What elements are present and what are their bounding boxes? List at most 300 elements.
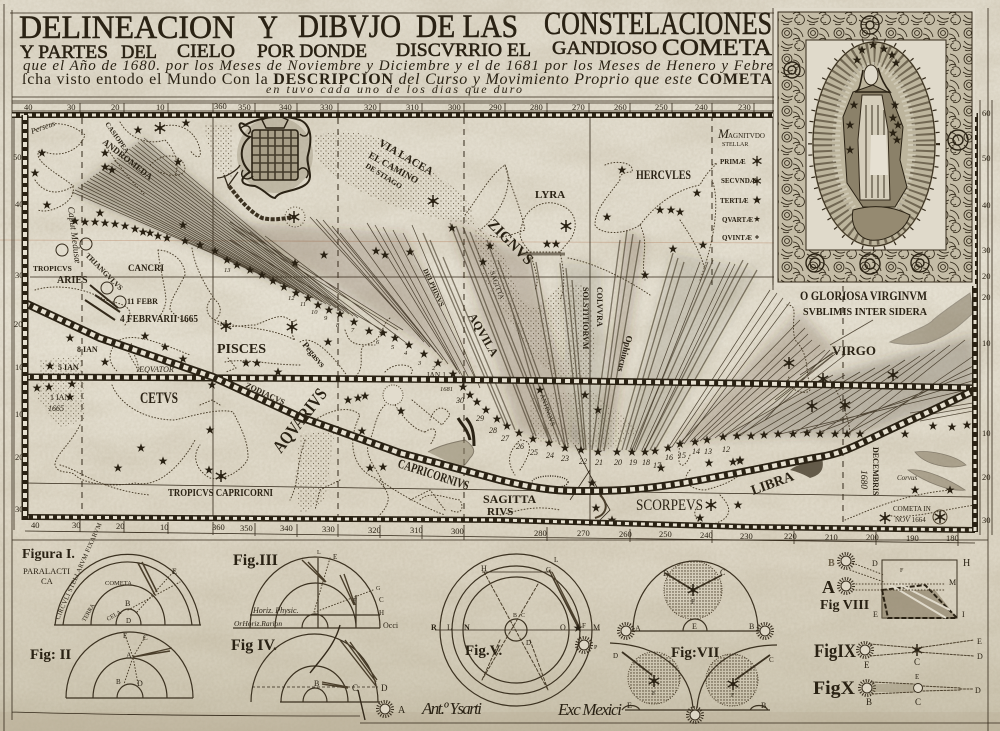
figure VII: B [761,701,766,710]
far right bundle of rays [723,340,975,437]
bottom degree scale: 280 [534,528,547,538]
map labels: DELPHINVS [421,267,446,308]
aquarius figure [290,385,450,520]
map labels: SAGITTA [483,492,536,506]
sun and signature: Exc Mexici [557,700,622,719]
figure I: Figura I. [22,547,75,562]
figure II: C [143,634,148,642]
day numbers of the comet: 6 [376,339,380,346]
side degree scales: 10 [982,338,990,348]
figure VIII: B [828,558,835,569]
figure I: CA [41,576,54,586]
figure I: PARALACTI [23,566,70,576]
title block [19,6,773,96]
inset: Virgin of Guadalupe in floral frame [774,8,975,286]
hydra crater and raven figures [908,452,966,494]
tail tone shading [72,138,975,450]
cygnus figure [465,165,525,237]
bottom degree scale: 230 [740,531,753,541]
figure V: F [582,622,586,630]
map labels: SAGITTA [488,270,506,300]
figure III: OrHoriz.Rarion [234,619,282,628]
figure V: P [594,645,598,651]
map labels: ANDROMEDA [101,137,155,182]
figure VII: D [613,652,618,660]
title line 1: CONSTELACIONES [544,6,772,42]
day numbers of the comet: 15 [678,451,686,460]
map labels: DECEMBRIS [871,447,880,496]
hand and chain holding the star [217,165,305,227]
top degree scale: 250 [655,102,668,112]
figure II: A [126,651,132,660]
side degree scales: 40 [982,200,990,210]
top degree scale: 300 [448,102,461,112]
map labels: Corvus [897,474,918,482]
sagittarius figure [500,440,610,520]
perseus cassiopeia andromeda figures [35,122,200,211]
dashed meridians [82,115,843,530]
day numbers of the comet: 18 [642,458,650,467]
figure X: B [866,697,872,707]
figure VIII: D [872,559,878,568]
title line 2: GANDIOSO [552,38,657,59]
title line 1: Y [258,10,278,46]
map labels: SCORPEVS [636,497,703,514]
top degree scale: 340 [279,102,292,112]
left band [22,115,28,520]
figure X: FigX [813,678,855,699]
diagrams section [22,522,983,722]
map labels: ANTINOVS [538,393,556,427]
title line 2: CIELO [177,41,235,62]
top degree scale: 230 [738,102,751,112]
title line 2: DISCVRRIO EL [396,40,531,61]
day numbers of the comet: 14 [692,447,700,456]
figure I: B [125,599,130,608]
sun and signature: A [398,705,406,716]
figure VII: E [692,622,697,631]
day numbers of the comet: 17 [653,461,662,470]
side degree scales [13,100,992,535]
top degree scale: 350 [238,102,251,112]
figure V: Fig.V. [465,643,502,659]
legend: magnitudes of the stars: AGNITVDO [728,132,765,140]
day numbers of the comet: 20 [614,458,622,467]
figure VIII: M [949,578,956,587]
figure X: E [915,673,919,681]
scorpius figure [679,445,745,525]
figure III: E [333,553,337,561]
title line 1: DIBVJO [298,9,401,45]
coat of arms [237,114,313,198]
top degree scale: 240 [695,102,708,112]
title line 2 [20,35,772,63]
map labels: SOLSTITIORVM [581,287,590,350]
legend: magnitudes of the stars: TERTIÆ [720,197,749,205]
sun and signature [378,699,622,719]
map labels: TROPICVS [33,264,72,273]
side degree scales: 20 [15,452,24,462]
figure V: G [546,566,551,574]
sun and signature: Ant.º Ysarti [421,699,482,718]
side degree scales: 20 [982,292,990,302]
lyra figure [520,203,650,300]
aries and taurus dark knot [56,238,126,320]
milky way [38,125,640,515]
bottom degree scale [25,520,975,546]
map labels: SVBLIMIS INTER SIDERA [803,306,927,318]
figure VIII: E [873,610,878,619]
pegasus figure [300,318,412,380]
title line 1 [19,6,772,46]
map labels: 1 IAN [50,393,70,402]
virgin figure [843,65,910,240]
map labels: DE STIAGO [364,161,404,191]
map labels [29,119,931,524]
comet of 1664 [845,490,975,524]
day numbers of the comet: 4 [404,350,408,357]
figure IX [814,637,983,670]
day numbers of the comet: 1681 [440,386,453,393]
figure VIII: Fig VIII [820,598,869,613]
top degree scale: 20 [111,102,120,112]
map labels: 8 IAN [77,345,98,354]
stars of hercules and lyra [290,165,708,279]
legend: magnitudes of the stars: M [717,126,730,141]
side degree scales: 30 [15,270,24,280]
day numbers of the comet: 13 [224,267,231,274]
map labels: Pegasvs [300,340,328,370]
bottom degree scale: 10 [160,522,168,532]
legend: magnitudes of the stars: SECVNDÆ [721,177,757,185]
map labels: TROPICVS CAPRICORNI [168,488,273,499]
side degree scales: 40 [15,199,24,209]
side degree scales: 60 [982,108,990,118]
map labels: 4 FEBRVARII 1665 [120,314,198,325]
figure I: COMETA [105,580,132,587]
side degree scales: 50 [13,152,22,162]
figure X [813,673,981,707]
bottom degree scale: 340 [280,523,293,533]
map labels: ZODIACVS [244,381,287,407]
figure VII: A [635,624,641,633]
figure VII: C [720,568,725,577]
figure III: F [353,597,357,605]
legend: magnitudes of the stars: PRIMÆ [720,158,746,166]
floral border [778,12,972,282]
legend: magnitudes of the stars: QVARTÆ [722,216,753,224]
figure III: C [379,596,384,604]
day numbers of the comet: 28 [489,426,497,435]
day numbers of the comet: 8 [336,322,340,329]
bottom degree scale: 210 [825,532,838,542]
day numbers of the comet: 30 [455,396,464,405]
map labels: CANCRI [128,263,164,273]
map labels: EL CAMINO [367,151,420,186]
figure IV [231,625,388,720]
figure V: L [554,556,558,564]
figure II [30,632,193,698]
other stars by ecliptic [536,385,744,524]
figure VII: F [652,691,656,697]
central left bundle of rays [230,217,480,388]
legend: magnitudes of the stars: QVINTÆ [722,234,752,242]
side degree scales: 30 [982,515,990,525]
figure V: C [521,613,525,619]
side degree scales: 10 [15,409,24,419]
title line 1: DELINEACION [19,10,235,46]
top degree scale: 10 [156,102,164,112]
map labels: ARIES [57,275,88,286]
lyra lamp hatching [520,252,565,256]
figure X: D [975,686,981,695]
map labels: COMETA IN [893,505,931,513]
figure VIII: A [822,577,835,597]
bottom degree scale: 240 [700,530,713,540]
bottom degree scale: 330 [322,524,335,534]
figure VIII [820,554,970,619]
ecliptic band [25,303,975,491]
bottom degree scale: 220 [784,531,797,541]
map labels: NOV 1664 [895,516,926,524]
map labels: Perseus [29,119,56,136]
legend: magnitudes of the stars: STELLAR [722,142,748,148]
hercules figure [595,162,717,280]
cetus figure [55,385,248,495]
figure V: L [447,623,452,632]
day numbers of the comet: 27 [501,434,510,443]
taurus pisces area figures [35,248,296,340]
figure VII: F [691,598,695,606]
title line 2: DEL [121,42,157,63]
figure V: B [513,613,517,619]
map labels: RIVS [487,506,513,518]
figure VII: D [663,569,669,578]
top degree scale: 260 [614,102,627,112]
figure VIII: I [962,610,965,619]
map labels: AQVILA [465,310,502,359]
title line 4: ſcha visto entodo el Mundo Con la DESCRIPCION del Curso y Movimiento Proprio que este COMETA [22,71,772,88]
stars of the north sky [30,118,190,229]
halo of stars [852,40,900,67]
title line 2: Y PARTES [20,42,108,63]
top degree scale: 310 [406,102,419,112]
top degree scale: 30 [67,102,76,112]
top degree scale: 40 [24,102,32,112]
figure VII: F [731,693,735,699]
day numbers of the comet: 9 [324,315,328,322]
figure II: E [123,632,127,640]
map labels: Ophiucus [615,334,635,373]
figure II: Fig: II [30,647,71,663]
central right tails [592,230,757,451]
mandorla rays [810,39,938,249]
top degree scale: 360 [214,101,227,111]
figure III: H [379,609,384,617]
map labels: CETVS [140,390,178,407]
bottom band [25,517,975,530]
day numbers of the comet: 11 [300,301,306,308]
figure V: R [431,623,437,632]
figure I: E [172,567,177,576]
bottom degree scale: 300 [451,526,464,536]
figure V: M [593,623,600,632]
figure V: O [560,623,566,632]
capricorn figure [420,418,474,512]
figure IV: Fig IV. [231,637,277,654]
top degree scale [12,101,775,112]
map labels: VIA LACEA [376,137,435,178]
side degree scales: 20 [982,472,990,482]
figure IX: C [914,657,920,667]
upper left bundle of rays [72,138,358,318]
constellation figures [30,114,975,525]
day numbers of the comet: 24 [546,451,554,460]
day numbers of the comet: 22 [579,457,587,466]
map labels: AQVARIVS [268,384,331,456]
right band [972,113,978,532]
bottom degree scale: 190 [906,533,919,543]
day numbers of the comet: 7 [351,327,355,334]
figure I: TERRA [82,602,97,623]
virgo wing and figure [784,293,973,435]
figure IX: E [977,637,982,646]
side degree scales: 10 [15,362,24,372]
side degree scales: 20 [14,319,22,329]
figure VII: E [627,701,632,710]
libra dark crescent [790,458,823,478]
map labels: TRIANGVLVS [84,251,125,292]
day numbers of the comet: 26 [516,442,524,451]
virgo rays [765,320,873,420]
map labels: LYRA [535,189,565,201]
central dark tails [423,223,586,450]
figure I: D [126,617,131,625]
comet path stars [70,216,972,456]
top degree scale: 270 [572,102,585,112]
figure VIII: F [900,568,904,574]
figure V: H [481,564,487,573]
top band [12,112,773,118]
top degree scale: 320 [364,102,377,112]
bottom degree scale: 250 [659,529,672,539]
legend: magnitudes of the stars [717,126,765,242]
bottom degree scale: 40 [31,520,40,530]
map labels: O GLORIOSA VIRGINVM [800,289,927,303]
top degree scale: 290 [489,102,502,112]
day numbers of the comet: 21 [595,458,603,467]
day numbers of the comet [224,267,730,470]
bottom degree scale: 350 [240,523,253,533]
map labels: Caput Medusæ [65,206,82,265]
side degree scales: 30 [982,245,990,255]
figure II: B [116,678,121,686]
bottom degree scale: 30 [72,520,80,530]
figure IX: E [864,660,870,670]
figure I [22,522,201,625]
figure VII: C [769,656,774,664]
figure I: CELA [106,609,123,623]
figure X: C [915,697,921,707]
day numbers of the comet: 3 [417,360,422,367]
figure III: Horiz. Physic. [252,606,299,615]
map labels: VIRGO [832,343,876,358]
title line 2: COMETA [662,35,772,60]
bottom degree scale: 360 [212,522,225,532]
day numbers of the comet: 12 [722,445,730,454]
bottom degree scale: 180 [946,533,959,543]
bottom degree scale: 320 [368,525,381,535]
figure VIII: H [963,558,970,569]
figure II: D [137,679,143,688]
figure III: L [317,550,321,556]
title line 2: POR DONDE [257,41,367,62]
map labels: CAPRICORNIVS [396,456,471,493]
comet tails [72,138,975,451]
bottom degree scale: 20 [116,521,124,531]
side degree scales: 20 [982,271,990,281]
map labels: 1680 [858,470,868,489]
side degree scales: 50 [982,153,990,163]
figure III [233,550,399,630]
figure VII: B [749,622,754,631]
map labels: CASIOPEA [103,121,131,155]
map labels: PISCES [217,342,266,357]
map labels: HERCVLES [636,167,691,182]
figure V: N [464,623,470,632]
map frame, equator, ecliptic bands [12,113,975,532]
figure VII: Fig:VII [671,645,719,661]
side degree scales: 10 [982,428,990,438]
map labels: IAN 1 [427,370,446,379]
figure VII [610,561,777,722]
figure III: Occi [383,621,399,630]
figure IV: C [352,683,358,693]
top degree scale: 280 [530,102,543,112]
figure IV: B [314,679,319,688]
equator band [25,377,975,388]
day numbers of the comet: 13 [704,447,712,456]
bottom degree scale: 200 [866,532,879,542]
map labels: LIBRA [749,469,797,499]
map labels: 5 IAN [58,363,79,372]
day numbers of the comet: 12 [288,295,295,302]
figure IX: D [977,652,983,661]
figure III: Fig.III [233,552,278,569]
figure V [431,554,600,706]
figure IX: FigIX [814,641,856,662]
figure I: CIRCVLI STELLARVM FIXARVM [54,522,104,621]
title line 1: DE LAS [416,9,518,45]
figure IV: D [381,683,388,693]
grid lines of the map [25,110,975,526]
figure V: D [526,639,531,647]
right fan of rays [680,320,845,443]
day numbers of the comet: 2 [432,365,436,372]
day numbers of the comet: 23 [561,454,569,463]
map labels: 11 FEBR [127,297,158,306]
title line 3: que el Año de 1680. por los Meses de Noviembre y Diciembre y el de 1681 por los Meses de Henero y Febre [23,58,773,74]
day numbers of the comet: 10 [311,309,318,316]
day numbers of the comet: 5 [391,344,395,351]
map labels: COLVVRA [595,287,604,327]
day numbers of the comet: 16 [665,453,673,462]
pisces figure [120,317,300,372]
figure III: G [376,586,381,592]
bottom degree scale: 310 [410,525,423,535]
side degree scales: 30 [15,504,24,514]
bottom degree scale: 260 [619,529,632,539]
